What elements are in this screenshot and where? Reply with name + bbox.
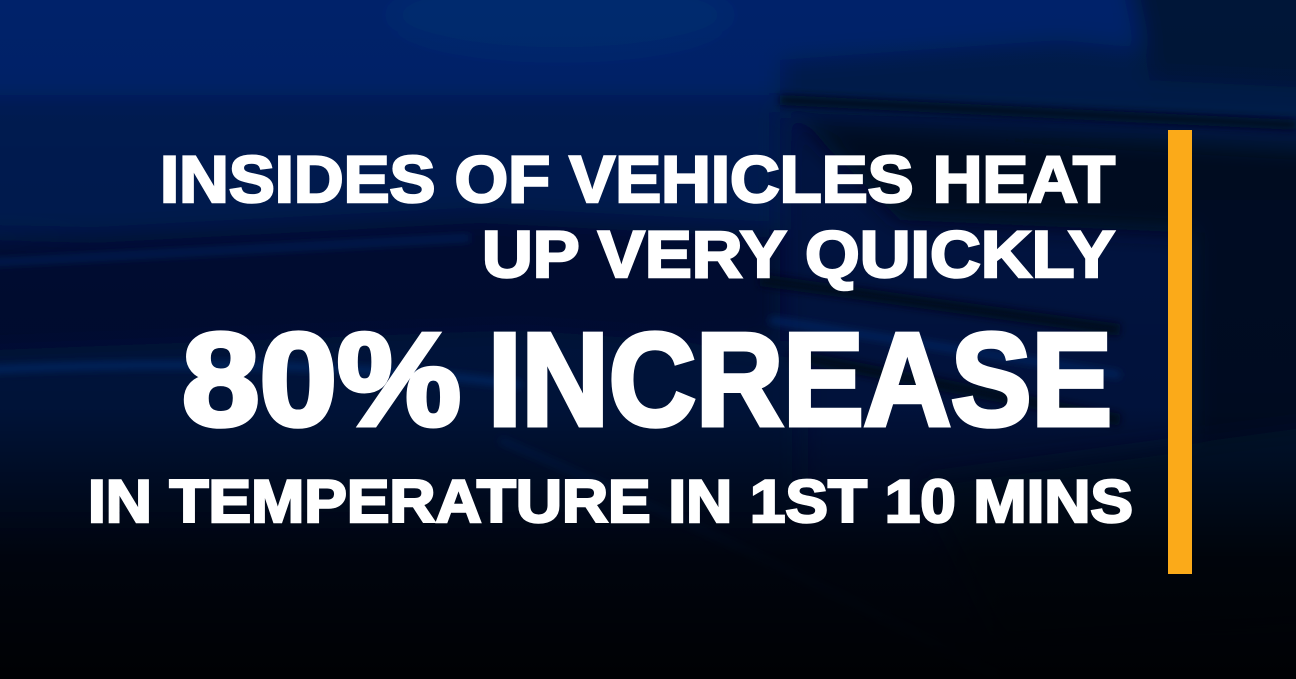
subheading: in temperature in 1st 10 mins: IN TEMPERATURE IN 1ST 10 MINS	[88, 468, 1133, 535]
key statistic: 80% increase	[182, 306, 1112, 453]
key statistic: 80% increase: 80%	[182, 306, 461, 453]
heading: first line: INSIDES OF VEHICLES HEAT	[160, 142, 1115, 216]
heading: second line: UP VERY QUICKLY	[482, 217, 1115, 291]
key statistic: 80% increase: INCREASE	[488, 306, 1112, 453]
accent bar	[1168, 130, 1192, 574]
